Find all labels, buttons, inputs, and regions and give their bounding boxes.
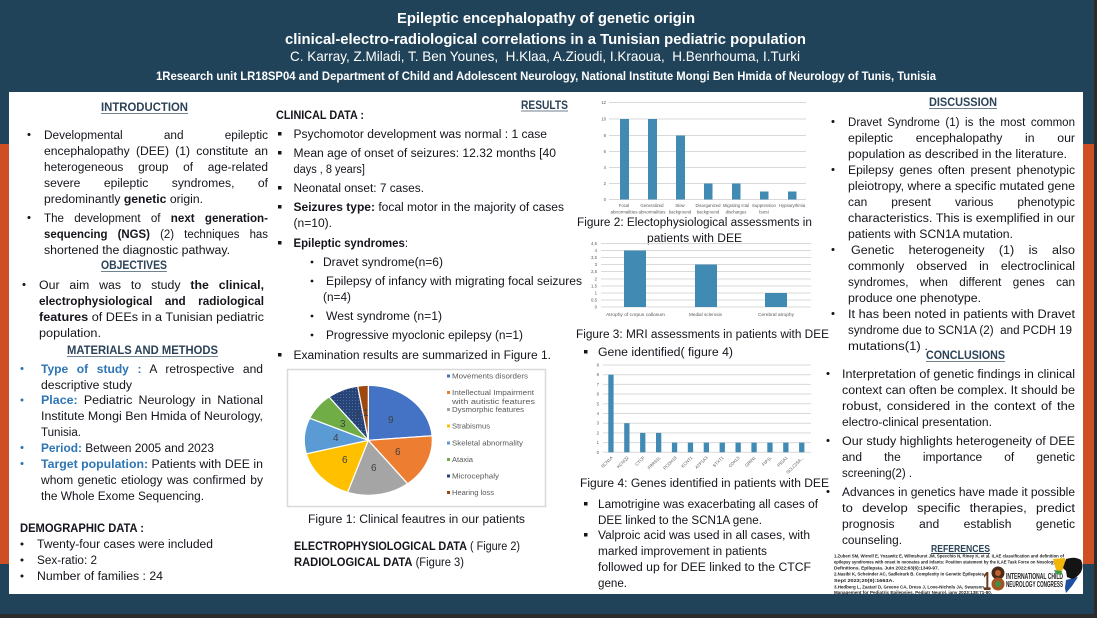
text: treatment findings: Valproic acid was used in all cases, with: [598, 530, 810, 542]
panel: discussion: commonly observed in electroclinical: [848, 261, 1075, 273]
panel: conclusions: electro-clinical presentation.: [842, 417, 992, 429]
panel: conclusions: robust, considered in the context of the: [842, 401, 1075, 413]
affiliation: 1Research unit LR18SP04 and Department of Child and Adolescent Neurology, National Institute Mongi Ben Hmida of Neurology of Tunis, Tunisia: [156, 71, 937, 83]
pie chart: clinical features: 9: [388, 415, 394, 426]
bar chart: figure 4: 5: [597, 401, 600, 406]
panel: materials and methods: Type of study : A retrospective and: [41, 364, 263, 376]
bar chart: figure 4: [597, 362, 811, 475]
bar chart: figure 2: 12: [601, 100, 607, 105]
caption: figure 2: [577, 217, 812, 245]
bar chart: figure 3: 4,5: [591, 241, 598, 246]
panel: conclusions: screening(2) .: [842, 468, 912, 480]
title block: [156, 10, 937, 83]
panel: conclusions: Our study highlights heterogeneity of DEE: [842, 436, 1075, 448]
panel: discussion: can present various phenotypic: [848, 197, 1075, 209]
pie legend: Hearing loss: [452, 488, 494, 497]
panel: conclusions: to develop specific therapies, predict: [842, 503, 1076, 515]
panel: introduction: [28, 102, 269, 257]
panel: discussion: pleiotropy, where a specific mutated gene: [848, 181, 1075, 193]
pie chart: clinical features: 1: [363, 408, 369, 419]
panel: objectives: Our aim was to study the clinical,: [39, 280, 264, 292]
panel: introduction: Developmental and epileptic: [44, 130, 268, 142]
bar chart: figure 2: 10: [601, 116, 607, 122]
bar chart: figure 2: background: [697, 210, 720, 214]
panel: discussion: Genetic heterogeneity (1) is also: [851, 245, 1075, 257]
panel: references: Management for Pediatric Epilepsies. Pediatr Neurol. janv 2023;138:71-80.: [834, 590, 992, 595]
bar chart: figure 4: 2: [597, 430, 600, 435]
heading: conclusions: CONCLUSIONS: [926, 350, 1005, 362]
bar chart: figure 4: PCDH19: [662, 455, 678, 471]
heading: references: REFERENCES: [931, 544, 990, 555]
bar chart: figure 4: 4: [597, 411, 600, 416]
bar chart: figure 2: Migrating Ictal: [723, 203, 749, 208]
text: treatment findings: Lamotrigine was exacerbating all cases of: [598, 499, 819, 511]
bar chart: figure 2: Hypsarythmia: [779, 203, 806, 208]
caption: figure 1: Figure 1: Clinical feautres in our patients: [308, 514, 525, 526]
bar chart: figure 4: PIGA1: [776, 455, 789, 468]
heading: demographic data: DEMOGRAPHIC DATA :: [20, 523, 144, 535]
text: gene identified: Gene identified( figure 4): [598, 347, 733, 359]
panel: clinical data: Examination results are summarized in Figure 1.: [294, 350, 551, 362]
panel: clinical data: (n=4): [323, 292, 351, 304]
panel: references: 2.Nasibi K, Scheinder AC, Sadleirark B. Complexity in Genetic Epilepsies: [834, 572, 985, 576]
bar chart: figure 2: discharges: [726, 210, 746, 214]
bar chart: figure 3: 1: [595, 290, 598, 296]
bar chart: figure 2: 4: [604, 165, 607, 170]
panel: discussion: patients with SCN1A mutation.: [848, 229, 1013, 241]
pie chart: clinical features: 4: [333, 433, 339, 444]
bar chart: figure 2: background: [669, 210, 692, 214]
bar chart: figure 4: 1: [597, 440, 600, 445]
panel: clinical data: [276, 110, 582, 362]
heading: clinical data: CLINICAL DATA :: [276, 110, 364, 122]
panel: clinical data: West syndrome (n=1): [326, 311, 442, 323]
pie chart: clinical features: [288, 370, 546, 506]
bar chart: figure 3: 2,5: [591, 269, 598, 274]
bar chart: figure 4: 6: [597, 392, 600, 396]
bar chart: figure 2: abnormalities: [638, 210, 666, 214]
pie legend: with autistic features: [451, 397, 535, 406]
text: treatment findings: marked improvement in patients: [598, 546, 767, 558]
panel: introduction: sequencing (NGS) (2) techniques has: [44, 229, 268, 241]
panel: introduction: severe epileptic syndromes, of: [44, 178, 269, 190]
text: electrophysiological and radiological data: RADIOLOGICAL DATA (Figure 3): [294, 557, 464, 569]
bar chart: figure 3: 4: [595, 248, 598, 253]
panel: introduction: predominantly genetic origin.: [44, 194, 203, 206]
bar chart: figure 4: GRIN1: [744, 455, 757, 468]
bar chart: figure 4: SCN1A: [600, 455, 614, 469]
bar chart: figure 4: ATP1A3: [694, 455, 709, 470]
panel: conclusions: and the importance of genetic: [842, 452, 1075, 464]
panel: discussion: Dravet Syndrome (1) is the most common: [848, 117, 1075, 129]
panel: introduction: shortened the diagnostic pathway.: [44, 245, 230, 257]
text: electrophysiological and radiological data: ELECTROPHYSIOLOGICAL DATA ( Figure 2): [294, 541, 520, 553]
panel: clinical data: Psychomotor development was normal : 1 case: [294, 129, 547, 141]
panel: discussion: It has been noted in patients with Dravet: [848, 309, 1076, 321]
bar chart: figure 4: 7: [597, 382, 600, 387]
bar chart: figure 3: 0: [595, 304, 598, 310]
bar chart: figure 4: KCNQ2: [616, 455, 630, 469]
bar chart: figure 2: Disorganized: [695, 203, 721, 208]
panel: materials and methods: descriptive study: [41, 380, 132, 392]
bar chart: figure 2: Suppression: [752, 203, 777, 208]
panel: discussion: mutations(1) .: [848, 341, 928, 353]
bar chart: figure 3: 0,5: [591, 298, 598, 302]
panel: materials and methods: Place: Pediatric Neurology in National: [41, 395, 263, 407]
panel: references: epilepsy syndromes with onset in neonates and infants: Position statement by the ILAE Task Force on Nosology and: [834, 560, 1064, 564]
panel: clinical data: Epilepsy of infancy with migrating focal seizures: [326, 276, 582, 288]
panel: introduction: heterogeneous group of age-related: [44, 162, 268, 174]
bar chart: figure 2: [601, 100, 806, 214]
caption: figure 3: Figure 3: MRI assessments in patients with DEE: [576, 329, 829, 341]
text: treatment findings: [584, 499, 819, 590]
icon: congress logo: [983, 558, 1082, 596]
bar chart: figure 3: 3: [595, 262, 598, 267]
panel: references: Sept 2023;20(9):1663A.: [834, 578, 894, 583]
heading: introduction: INTRODUCTION: [101, 102, 188, 114]
caption: figure 2: Figure 2: Electophysiological assessments in: [577, 217, 812, 229]
panel: discussion: [832, 97, 1076, 353]
panel: clinical data: Neonatal onset: 7 cases.: [294, 183, 424, 195]
panel: objectives: features of DEEs in a Tunisian pediatric: [39, 312, 264, 324]
panel: references: Definitions. Epilepsia. Juin 2022;63(6):1349-97.: [834, 566, 939, 570]
panel: introduction: The development of next generation-: [44, 213, 268, 225]
panel: discussion: syndromes, when different genes can: [848, 277, 1075, 289]
panel: objectives: electrophysiological and radiological: [39, 296, 264, 308]
pie legend: [447, 372, 535, 497]
panel: conclusions: context can often be complex. It should be: [842, 385, 1075, 397]
panel: materials and methods: Period: Between 2005 and 2023: [41, 443, 214, 455]
pie chart: clinical features: 3: [340, 419, 346, 430]
bar chart: figure 3: 3,5: [591, 255, 598, 260]
panel: conclusions: prognosis and establish genetic: [842, 519, 1075, 531]
caption: figure 4: Figure 4: Genes identified in patients with DEE: [580, 478, 829, 490]
panel: clinical data: days , 8 years]: [294, 164, 365, 176]
bar chart: figure 2: Focal: [619, 203, 629, 208]
panel: clinical data: Mean age of onset of seizures: 12.32 months [40: [294, 148, 556, 160]
bar chart: figure 3: Cerebral atrophy: [758, 312, 795, 317]
bar chart: figure 2: Slow: [675, 203, 686, 208]
subtitle: clinical-electro-radiological correlations in a Tunisian pediatric population: [285, 31, 806, 48]
bar chart: figure 4: FIP1L: [761, 455, 773, 467]
bar chart: figure 2: abnormalities: [610, 210, 638, 214]
bar chart: figure 4: KCNT1: [680, 455, 694, 469]
bar chart: figure 2: Generalized: [640, 203, 664, 208]
panel: demographic data: Number of families : 24: [37, 571, 164, 583]
panel: materials and methods: Tunisia.: [41, 427, 81, 439]
authors: C. Karray, Z.Miladi, T. Ben Younes, H.Klaa, A.Zioudi, I.Kraoua, H.Benrhouma, I.Turki: [290, 48, 800, 64]
panel: demographic data: Twenty-four cases were included: [37, 539, 213, 551]
bar chart: figure 4: 8: [597, 372, 600, 377]
panel: objectives: population.: [39, 328, 101, 340]
bar chart: figure 4: CDKL5: [727, 455, 741, 469]
panel: clinical data: (n=10).: [294, 218, 332, 230]
panel: clinical data: Seizures type: focal motor in the majority of cases: [294, 202, 564, 214]
bar chart: figure 3: 2: [595, 276, 598, 282]
panel: references: [834, 544, 1065, 595]
bar chart: figure 3: 1,5: [591, 284, 598, 288]
title: Epileptic encephalopathy of genetic origin: [397, 10, 695, 27]
panel: discussion: Epilepsy genes often present phenotypic: [848, 165, 1075, 177]
panel: materials and methods: the Whole Exome Sequencing.: [41, 491, 204, 503]
bar chart: figure 4: STXT1: [712, 455, 725, 468]
pie legend: Microcephaly: [452, 472, 499, 480]
bar chart: figure 2: 6: [604, 149, 607, 154]
panel: introduction: encephalopathy (DEE) (1) constitute an: [44, 146, 268, 158]
panel: materials and methods: whom genetic etiology was confirmed by: [40, 475, 263, 487]
pie chart: clinical features: 6: [371, 463, 377, 474]
pie legend: Dysmorphic features: [452, 405, 524, 414]
bar chart: figure 2: 2: [604, 181, 607, 186]
panel: demographic data: [20, 523, 213, 583]
panel: objectives: [22, 260, 264, 340]
text: treatment findings: DEE linked to the SCN1A gene.: [598, 515, 762, 527]
bar chart: figure 2: 0: [604, 197, 607, 202]
bar chart: figure 3: [591, 241, 811, 317]
bar chart: figure 4: 0: [597, 450, 600, 455]
panel: materials and methods: Institute Mongi Ben Hmida of Neurology,: [41, 411, 263, 423]
bar chart: figure 2: burst: [759, 210, 770, 214]
bar chart: figure 3: Atrophy of corpus callosum: [606, 312, 665, 317]
heading: objectives: OBJECTIVES: [101, 260, 167, 272]
icon: congress logo: INTERNATIONAL CHILD: [1006, 572, 1063, 581]
pie chart: clinical features: 3: [354, 410, 360, 421]
panel: discussion: population as described in the literature.: [848, 149, 1067, 161]
panel: conclusions: Interpretation of genetic findings in clinical: [842, 369, 1075, 381]
text: treatment findings: followed up for DEE linked to the CTCF: [598, 562, 811, 574]
panel: clinical data: Progressive myoclonic epilepsy (n=1): [326, 330, 523, 342]
panel: conclusions: [826, 350, 1076, 547]
bar chart: figure 3: Medial sclerosis: [689, 312, 722, 317]
heading: materials and methods: MATERIALS AND METHODS: [67, 345, 218, 357]
caption: figure 2: patients with DEE: [647, 233, 742, 245]
bar chart: figure 2: 8: [604, 133, 607, 138]
text: treatment findings: gene.: [598, 578, 627, 590]
heading: discussion: DISCUSSION: [929, 97, 997, 109]
panel: conclusions: Advances in genetics have made it possible: [842, 487, 1075, 499]
panel: clinical data: Dravet syndrome(n=6): [323, 257, 443, 269]
panel: references: 1.Zuberi SM, Wirrell E, Yozawitz E, Wilmshurst JM, Specchio N, Riney K, et al. ILAE classification and definition of: [834, 554, 1065, 558]
pie chart: clinical features: 6: [342, 455, 348, 466]
panel: discussion: characteristics. This is exemplified in our: [848, 213, 1075, 225]
bar chart: figure 4: CTCF: [634, 455, 646, 467]
panel: demographic data: Sex-ratio: 2: [37, 555, 97, 567]
panel: references: 3.Hedberg L, Zaatari D, Greene CA, Dress J, Love-Nichols JA, Swanson: [834, 584, 984, 590]
pie legend: Skeletal abnormality: [452, 438, 523, 448]
panel: discussion: epileptic encephalopathy in our: [848, 133, 1075, 145]
pie legend: Strabismus: [452, 422, 490, 430]
text: electrophysiological and radiological data: [294, 541, 520, 569]
panel: materials and methods: Target population: Patients with DEE in: [41, 459, 263, 471]
bar chart: figure 4: FRRS1L: [647, 455, 662, 470]
pie legend: Ataxia: [452, 455, 474, 464]
bar chart: figure 4: 3: [597, 421, 600, 426]
panel: materials and methods: [20, 345, 263, 503]
panel: discussion: produce one phenotype.: [848, 293, 981, 305]
panel: clinical data: Epileptic syndromes:: [294, 238, 408, 250]
icon: congress logo: 1: [983, 566, 991, 596]
pie legend: Intellectual Impairment: [452, 388, 535, 397]
pie chart: clinical features: 6: [395, 447, 401, 458]
bar chart: figure 4: 9: [597, 362, 600, 368]
panel: conclusions: counseling.: [842, 535, 902, 547]
heading: results: RESULTS: [521, 100, 568, 112]
pie legend: Movements disorders: [452, 372, 528, 380]
bar chart: figure 4: SCLC25A...: [785, 455, 805, 475]
panel: discussion: syndrome due to SCN1A (2) and PCDH 19: [848, 325, 1072, 337]
